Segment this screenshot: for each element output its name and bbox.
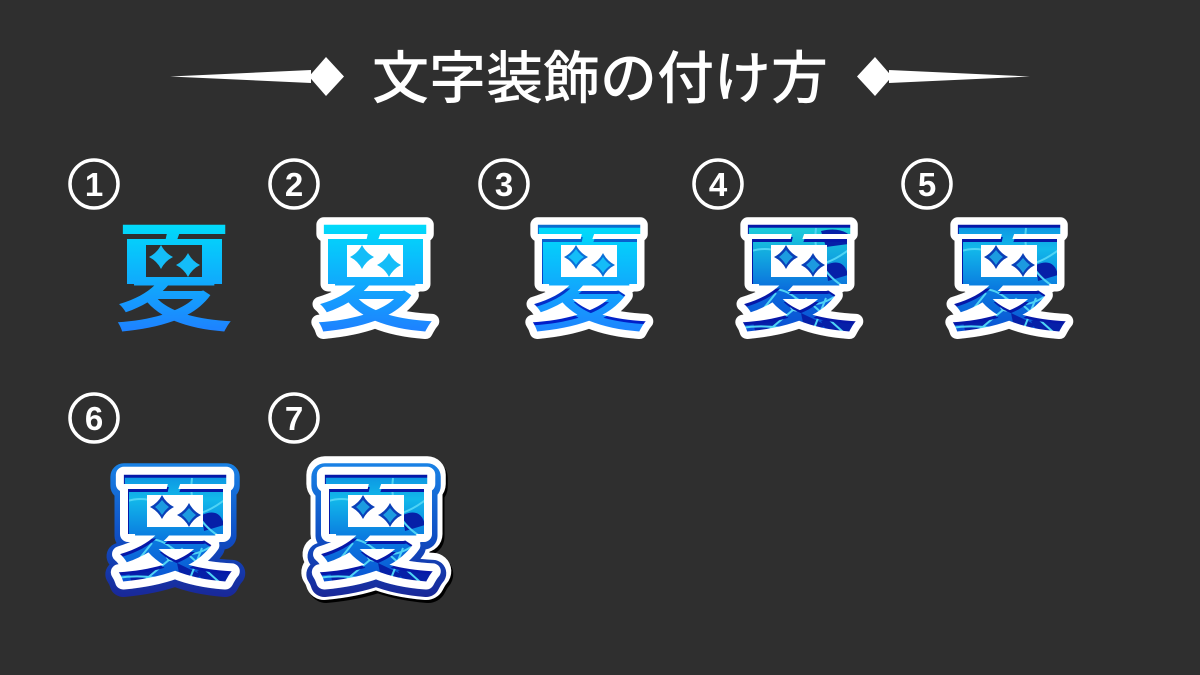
step number 1: 1 bbox=[85, 166, 103, 203]
step number 3 bbox=[480, 160, 528, 208]
glyph 7: outer white outline and black shadow: 夏 bbox=[317, 466, 437, 600]
right title ornament bbox=[857, 57, 1030, 96]
step number 7: 7 bbox=[285, 400, 303, 437]
glyph 7: outer white outline and black shadow: 夏 bbox=[316, 465, 436, 599]
glyph 2: white outline: 夏 bbox=[315, 213, 435, 347]
glyph 4: water texture: 夏 bbox=[739, 213, 859, 347]
glyph 6: blue outer rim: 夏 bbox=[115, 463, 235, 597]
step number 5 bbox=[903, 160, 951, 208]
glyph 1: gradient fill: 夏 bbox=[114, 213, 234, 347]
step number 2: 2 bbox=[285, 166, 303, 203]
step number 3: 3 bbox=[495, 166, 513, 203]
step number 5: 5 bbox=[918, 166, 936, 203]
glyph 7: outer white outline and black shadow: 夏 bbox=[316, 463, 436, 597]
glyph 3: inner shadow: 夏 bbox=[529, 213, 649, 347]
step number 6: 6 bbox=[85, 400, 103, 437]
glyph 2: white outline: 夏 bbox=[315, 213, 435, 347]
glyph 7: outer white outline and black shadow: 夏 bbox=[316, 463, 436, 597]
glyph 3: inner shadow: 夏 bbox=[530, 216, 650, 350]
glyph 4: water texture: 夏 bbox=[740, 216, 860, 350]
step number 6 bbox=[70, 394, 118, 442]
glyph 6: blue outer rim: 夏 bbox=[116, 466, 236, 600]
step number 7 bbox=[270, 394, 318, 442]
title: 文字装飾の付け方 bbox=[372, 47, 828, 111]
glyph 7: outer white outline and black shadow: 夏 bbox=[318, 466, 438, 600]
glyph 5: water texture with gradient overlay: 夏 bbox=[950, 216, 1070, 350]
step number 1 bbox=[70, 160, 118, 208]
step number 4 bbox=[694, 160, 742, 208]
left title ornament bbox=[170, 57, 344, 96]
step number 2 bbox=[270, 160, 318, 208]
glyph 6: blue outer rim: 夏 bbox=[115, 465, 235, 599]
glyph 5: water texture with gradient overlay: 夏 bbox=[949, 213, 1069, 347]
step number 4: 4 bbox=[709, 166, 728, 203]
